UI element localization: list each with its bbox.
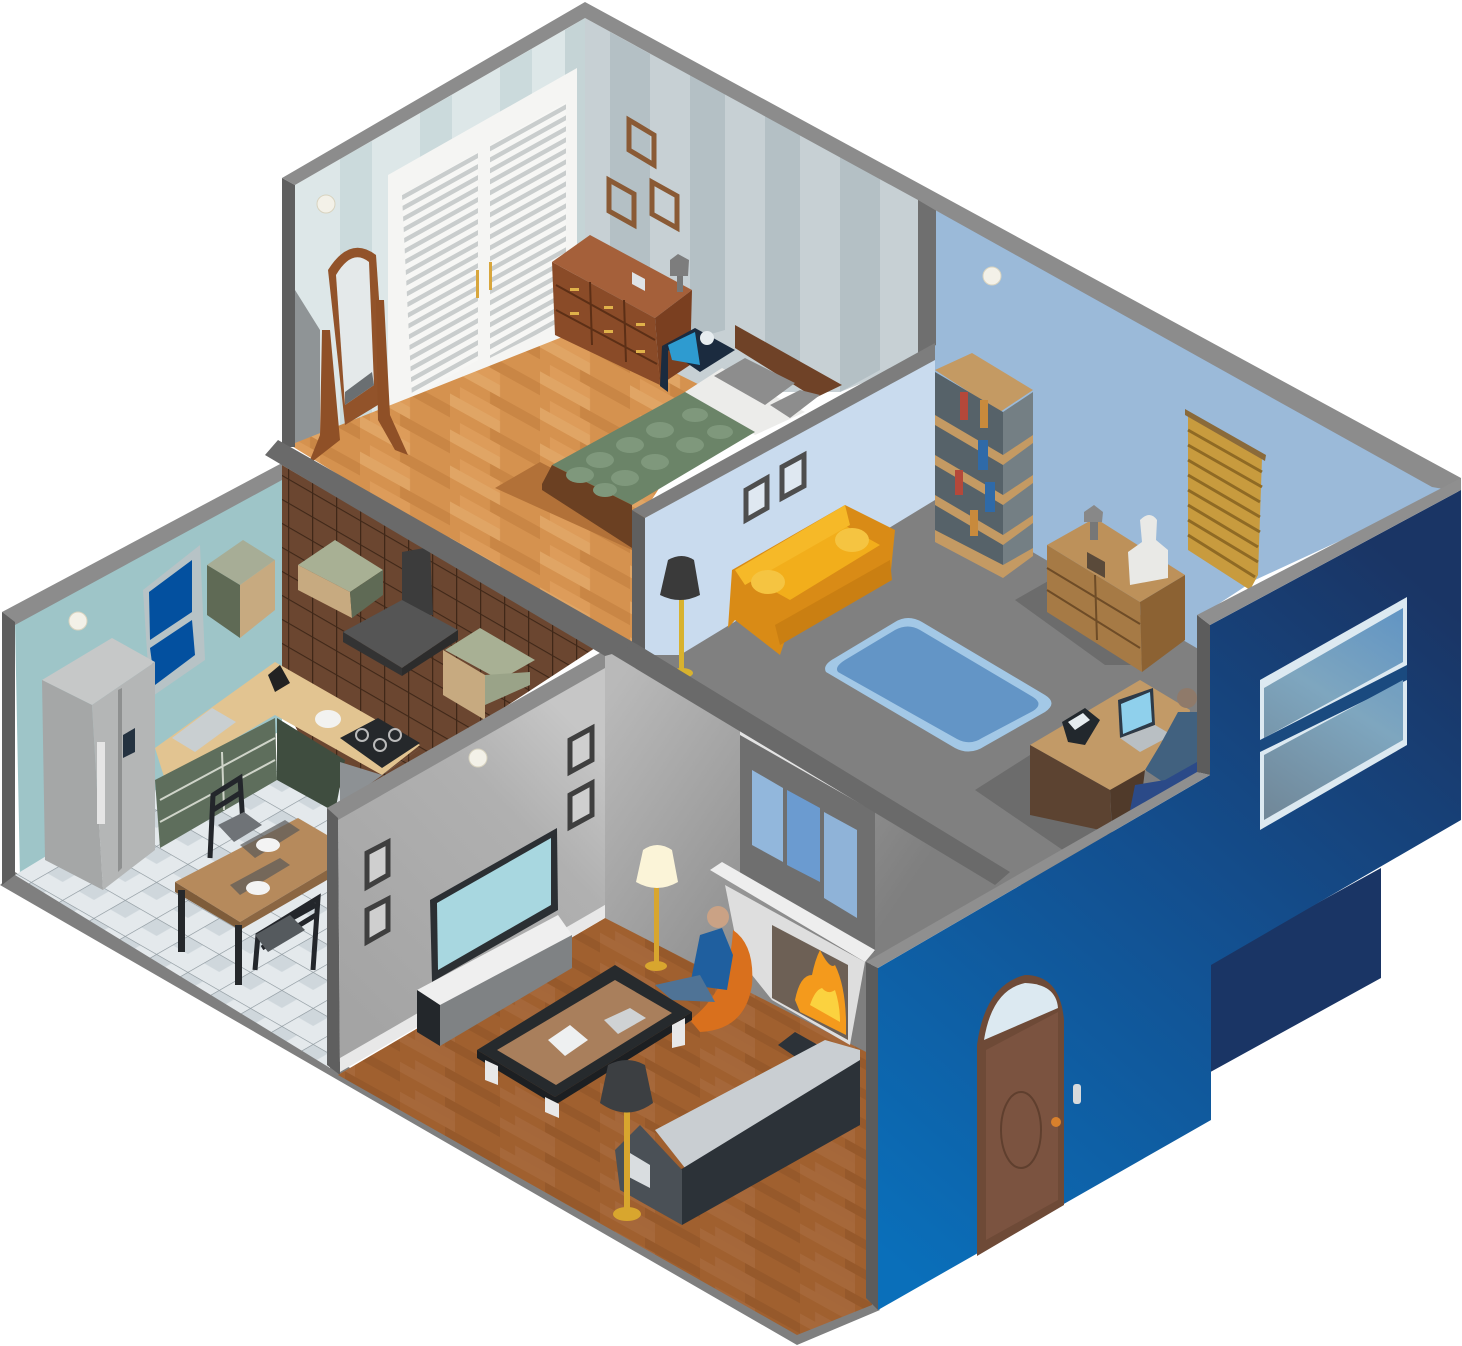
- panel: living room: [327, 650, 1005, 1335]
- upper window: [1260, 597, 1407, 830]
- sink: [172, 708, 236, 752]
- panel: blue exterior wall: [866, 478, 1461, 1310]
- dresser and bust: [1047, 505, 1185, 672]
- counter items: [268, 665, 341, 728]
- office floor: [645, 495, 1200, 885]
- smoke detector: [317, 195, 335, 213]
- partition wall: [632, 343, 935, 660]
- base slab: [0, 872, 880, 1345]
- blue rug: [825, 618, 1052, 752]
- cabinets: [155, 718, 345, 848]
- headboard: [735, 325, 842, 398]
- brick wall: [282, 465, 595, 815]
- kitchen left wall: [15, 477, 282, 878]
- wall cabinet: [207, 540, 275, 638]
- panel: bedroom: [282, 18, 920, 662]
- desk: [1030, 680, 1190, 838]
- panel: office: [632, 198, 1461, 885]
- bedroom right wall: [585, 18, 920, 392]
- window: [143, 545, 205, 698]
- chair seat front: [255, 915, 305, 952]
- sofa: [615, 1032, 860, 1225]
- baseboard: [340, 905, 605, 1072]
- central dividing wall, lower run: [605, 646, 1010, 885]
- living floor: [338, 918, 872, 1335]
- floor lamp: [600, 1060, 653, 1221]
- wardrobe: [388, 68, 577, 412]
- smoke detector: [469, 749, 487, 767]
- person at desk: [1130, 688, 1197, 810]
- bedroom floor: [290, 328, 720, 662]
- upper rim: [1197, 478, 1461, 625]
- top rim: [866, 772, 1210, 968]
- wall end: [327, 808, 340, 1075]
- wall pillar: [918, 198, 936, 355]
- bed: [542, 358, 820, 548]
- door keypad: [1073, 1084, 1081, 1104]
- front door: [977, 975, 1064, 1256]
- upper wall end: [1197, 615, 1210, 775]
- stove: [340, 718, 420, 768]
- cheval mirror: [308, 248, 408, 465]
- office right wall: [935, 210, 1461, 650]
- floor lamp: [660, 556, 700, 678]
- bedroom left wall: [295, 18, 585, 475]
- living left wall: [338, 660, 605, 1065]
- tv stand: [417, 915, 572, 1046]
- tile floor: [15, 760, 345, 1068]
- wall rim: [327, 650, 605, 820]
- woman in beanbag: [655, 906, 752, 1032]
- window blinds: [1185, 409, 1266, 590]
- lower rear block: [1205, 868, 1381, 1075]
- dresser: [552, 235, 692, 385]
- fireplace: [710, 862, 875, 1045]
- living right wall: [605, 650, 1005, 1080]
- nightstand: [660, 328, 735, 392]
- wall frames: [367, 728, 592, 942]
- wall window: [740, 728, 875, 952]
- oven front: [340, 745, 425, 805]
- dining table: [175, 818, 327, 985]
- front wall end: [866, 962, 878, 1310]
- smoke detector: [69, 612, 87, 630]
- counter: [155, 662, 420, 780]
- main blue wall: [878, 490, 1461, 1310]
- bedroom wall end: [282, 178, 295, 447]
- table lamp: [636, 845, 678, 971]
- top wall rim: [282, 2, 1461, 492]
- coffee table: [477, 965, 692, 1118]
- smoke detector: [983, 267, 1001, 285]
- fridge: [42, 638, 155, 890]
- floor shadow: [495, 462, 632, 550]
- chairs: [210, 778, 318, 970]
- chair seat: [218, 812, 262, 842]
- panel: kitchen: [2, 463, 595, 1068]
- central dividing wall: [265, 440, 640, 656]
- picture frames: [609, 120, 677, 228]
- tv: [430, 828, 558, 982]
- bookshelf: [935, 353, 1033, 578]
- wall frames: [746, 455, 804, 520]
- range hood: [343, 547, 458, 676]
- floor shadows: [975, 580, 1150, 855]
- kitchen wall rim: [2, 463, 282, 625]
- wall end: [2, 612, 15, 885]
- upper cabinets: [298, 540, 535, 720]
- yellow sofa: [728, 505, 895, 655]
